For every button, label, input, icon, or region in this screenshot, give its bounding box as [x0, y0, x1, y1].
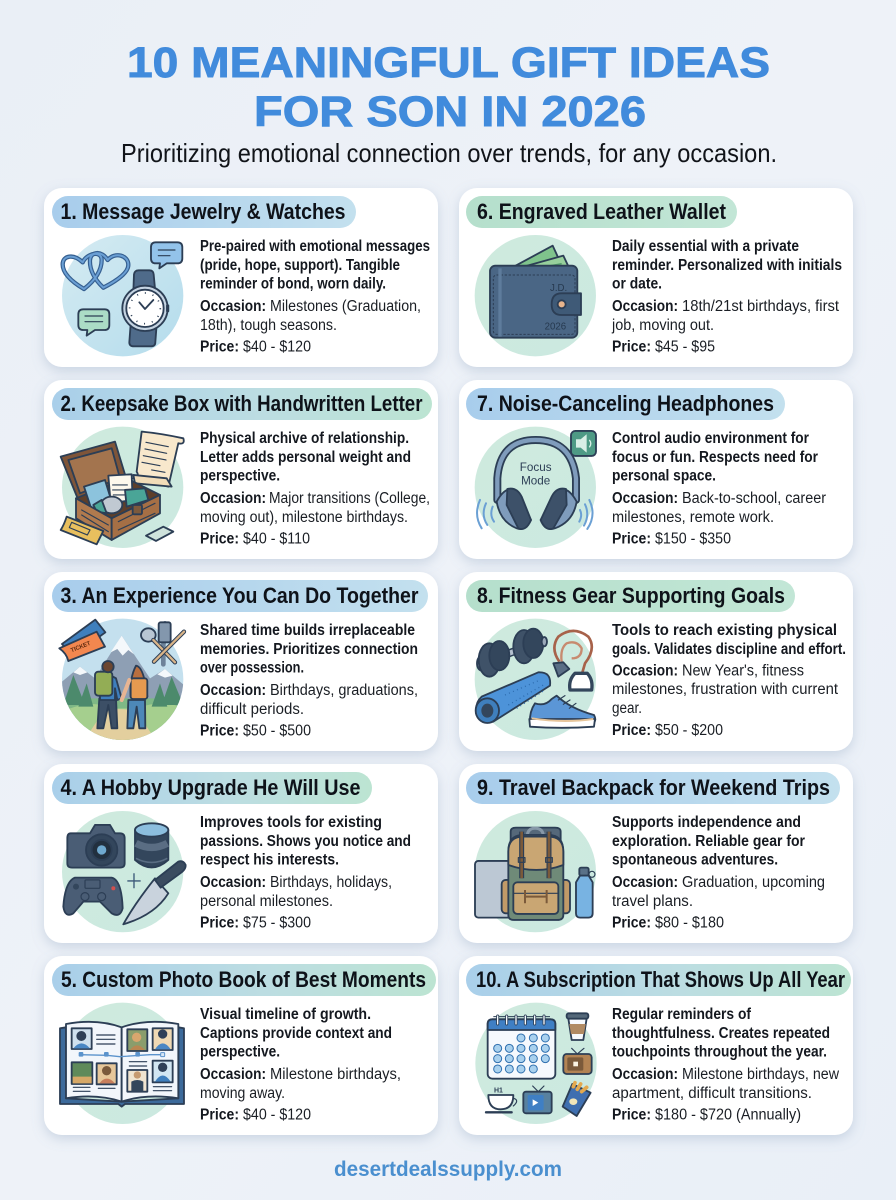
text block 4: Occasion:	[200, 874, 266, 891]
text block 7: personal space.	[612, 468, 716, 484]
text block 10: thoughtfulness. Creates repeated	[612, 1025, 830, 1042]
heading pill 3: 3. An Experience You Can Do Together	[60, 583, 419, 608]
text block 2	[200, 430, 430, 548]
heading pill 10	[466, 964, 851, 996]
text block 4: $75 - $300	[243, 914, 311, 932]
text block 6: 18th/21st birthdays, first	[682, 298, 840, 315]
text block 2: perspective.	[200, 468, 280, 484]
text block 6: Occasion:	[612, 298, 678, 315]
text block 6	[611, 238, 842, 356]
icon: engraved wallet with cash: 2026	[545, 322, 566, 333]
text block 8: Price:	[612, 722, 651, 739]
text block 6: or date.	[612, 276, 662, 292]
icon: dumbbell, resistance band, foam roller and shoe	[475, 619, 596, 740]
text block 1: Price:	[200, 338, 239, 356]
text block 8: milestones, frustration with current	[612, 681, 839, 698]
text block 2: Price:	[200, 530, 239, 548]
icon: couple hiking, tickets and utensils	[59, 618, 187, 742]
text block 1: reminder of bond, worn daily.	[200, 276, 386, 292]
text block 3: memories. Prioritizes connection	[200, 641, 418, 658]
text block 1: 18th), tough seasons.	[200, 317, 337, 334]
text block 6: reminder. Personalized with initials	[612, 257, 842, 274]
icon: engraved wallet with cash	[475, 235, 596, 356]
text block 8: New Year's, fitness	[682, 662, 804, 680]
panel: 10. A Subscription That Shows Up All Year	[459, 956, 853, 1135]
text block 10: Regular reminders of	[612, 1006, 752, 1023]
icon: hearts, watch and message bubbles	[62, 235, 183, 356]
heading pill 6: 6. Engraved Leather Wallet	[477, 199, 726, 224]
title: FOR SON IN 2026	[254, 88, 646, 136]
text block 1: $40 - $120	[243, 338, 311, 356]
icon: engraved wallet with cash: J.D.	[550, 283, 567, 294]
text block 3	[200, 622, 418, 740]
text block 1: (pride, hope, support). Tangible	[200, 257, 400, 274]
text block 4: passions. Shows you notice and	[200, 833, 411, 850]
text block 10: Milestone birthdays, new	[682, 1066, 840, 1083]
text block 5: Price:	[200, 1106, 239, 1124]
text block 7: Occasion:	[612, 490, 678, 507]
text block 7: focus or fun. Respects need for	[612, 449, 818, 466]
text block 10: apartment, difficult transitions.	[612, 1085, 812, 1102]
heading pill 9: 9. Travel Backpack for Weekend Trips	[477, 775, 830, 800]
text block 2: Major transitions (College,	[269, 490, 430, 507]
heading pill 1	[52, 196, 356, 228]
text block 3: Shared time builds irreplaceable	[200, 622, 415, 639]
icon: couple hiking, tickets and utensils: TICKET	[70, 641, 92, 654]
text block 5: moving away.	[200, 1085, 285, 1102]
text block 10	[612, 1006, 840, 1124]
text block 4	[200, 814, 411, 932]
text block 6: Price:	[612, 338, 651, 356]
text block 6: Daily essential with a private	[612, 238, 799, 255]
text block 7: $150 - $350	[655, 530, 731, 548]
text block 2: Physical archive of relationship.	[200, 430, 409, 447]
panel: 7. Noise-Canceling Headphones	[459, 380, 853, 559]
text block 8: gear.	[612, 700, 642, 717]
heading pill 7	[466, 388, 785, 420]
icon: camera, lens, controller and knife	[62, 811, 186, 932]
text block 7: Control audio environment for	[612, 430, 809, 447]
panel: 6. Engraved Leather Wallet	[459, 188, 853, 367]
text block 4: respect his interests.	[200, 852, 339, 868]
text block 10: touchpoints throughout the year.	[612, 1044, 827, 1060]
text block 3: over possession.	[200, 660, 304, 676]
icon: headphones with focus mode	[475, 427, 596, 548]
text block 8: Tools to reach existing physical	[612, 622, 837, 639]
text block 3: difficult periods.	[200, 701, 304, 718]
text block 3: Price:	[200, 722, 239, 740]
heading pill 2: 2. Keepsake Box with Handwritten Letter	[60, 391, 423, 416]
title: 10 MEANINGFUL GIFT IDEAS	[127, 39, 770, 87]
icon: open photo book	[60, 1003, 184, 1124]
panel: 1. Message Jewelry & Watches	[44, 188, 438, 367]
text block 9: Price:	[612, 914, 651, 932]
panel: 4. A Hobby Upgrade He Will Use	[44, 764, 438, 943]
text block 4: Improves tools for existing	[200, 814, 382, 831]
footer website: desertdealssupply.com	[334, 1158, 562, 1181]
panel: 8. Fitness Gear Supporting Goals	[459, 572, 853, 751]
icon: calendar, coffee, snacks and streaming	[475, 1003, 597, 1124]
text block 2: moving out), milestone birthdays.	[200, 509, 408, 526]
heading pill 6	[466, 196, 737, 228]
text block 7	[612, 430, 826, 548]
text block 5	[200, 1006, 401, 1124]
icon: backpack, tablet and water bottle	[475, 811, 596, 932]
text block 7: Back-to-school, career	[682, 490, 826, 507]
text block 3: Birthdays, graduations,	[270, 682, 418, 699]
text block 1: Pre-paired with emotional messages	[200, 238, 430, 255]
text block 3: Occasion:	[200, 682, 266, 699]
text block 9: spontaneous adventures.	[612, 852, 778, 868]
heading pill 1: 1. Message Jewelry & Watches	[60, 199, 346, 224]
text block 4: Price:	[200, 914, 239, 932]
text block 5: Visual timeline of growth.	[200, 1006, 371, 1023]
text block 9: $80 - $180	[655, 914, 724, 932]
text block 5: perspective.	[200, 1044, 280, 1060]
text block 9: exploration. Reliable gear for	[612, 833, 805, 850]
icon: headphones with focus mode: Mode	[521, 475, 550, 488]
text block 1: Occasion:	[200, 298, 266, 315]
text block 9: Supports independence and	[612, 814, 801, 831]
text block 5: Milestone birthdays,	[270, 1066, 401, 1083]
panel: 5. Custom Photo Book of Best Moments	[44, 956, 438, 1135]
text block 7: Price:	[612, 530, 651, 548]
text block 8	[612, 622, 846, 739]
text block 4: Birthdays, holidays,	[270, 874, 392, 891]
text block 6: job, moving out.	[611, 317, 714, 334]
text block 5: $40 - $120	[243, 1106, 311, 1124]
text block 9: Graduation, upcoming	[682, 874, 825, 891]
heading pill 8: 8. Fitness Gear Supporting Goals	[477, 583, 785, 608]
panel: 2. Keepsake Box with Handwritten Letter	[44, 380, 438, 559]
text block 3: $50 - $500	[243, 722, 311, 740]
panel: 9. Travel Backpack for Weekend Trips	[459, 764, 853, 943]
text block 8: $50 - $200	[655, 722, 723, 739]
heading pill 7: 7. Noise-Canceling Headphones	[477, 391, 774, 416]
heading pill 4: 4. A Hobby Upgrade He Will Use	[60, 775, 360, 800]
text block 2: $40 - $110	[243, 530, 310, 548]
panel: 3. An Experience You Can Do Together	[44, 572, 438, 751]
text block 5: Occasion:	[200, 1066, 266, 1083]
text block 8: goals. Validates discipline and effort.	[612, 641, 846, 658]
text block 9	[612, 814, 825, 932]
text block 1	[200, 238, 430, 356]
icon: calendar, coffee, snacks and streaming: H1	[494, 1088, 503, 1095]
heading pill 5: 5. Custom Photo Book of Best Moments	[61, 967, 426, 992]
heading pill 5	[52, 964, 436, 996]
heading pill 2	[52, 388, 432, 420]
text block 7: milestones, remote work.	[612, 509, 774, 526]
text block 2: Occasion:	[200, 490, 266, 507]
text block 9: Occasion:	[612, 874, 678, 891]
text block 10: Price:	[612, 1106, 651, 1124]
text block 10: $180 - $720 (Annually)	[655, 1106, 801, 1124]
heading pill 3	[52, 580, 428, 612]
icon: headphones with focus mode: Focus	[520, 461, 552, 474]
text block 10: Occasion:	[612, 1066, 678, 1083]
subtitle: Prioritizing emotional connection over trends, for any occasion.	[121, 138, 777, 168]
text block 6: $45 - $95	[655, 338, 715, 356]
text block 8: Occasion:	[612, 662, 678, 680]
text block 2: Letter adds personal weight and	[200, 449, 411, 466]
text block 9: travel plans.	[612, 893, 693, 910]
text block 5: Captions provide context and	[200, 1025, 392, 1042]
heading pill 8	[466, 580, 795, 612]
text block 1: Milestones (Graduation,	[270, 298, 421, 315]
text block 4: personal milestones.	[200, 893, 333, 910]
title	[127, 39, 770, 136]
icon: keepsake box with letter	[61, 427, 184, 548]
